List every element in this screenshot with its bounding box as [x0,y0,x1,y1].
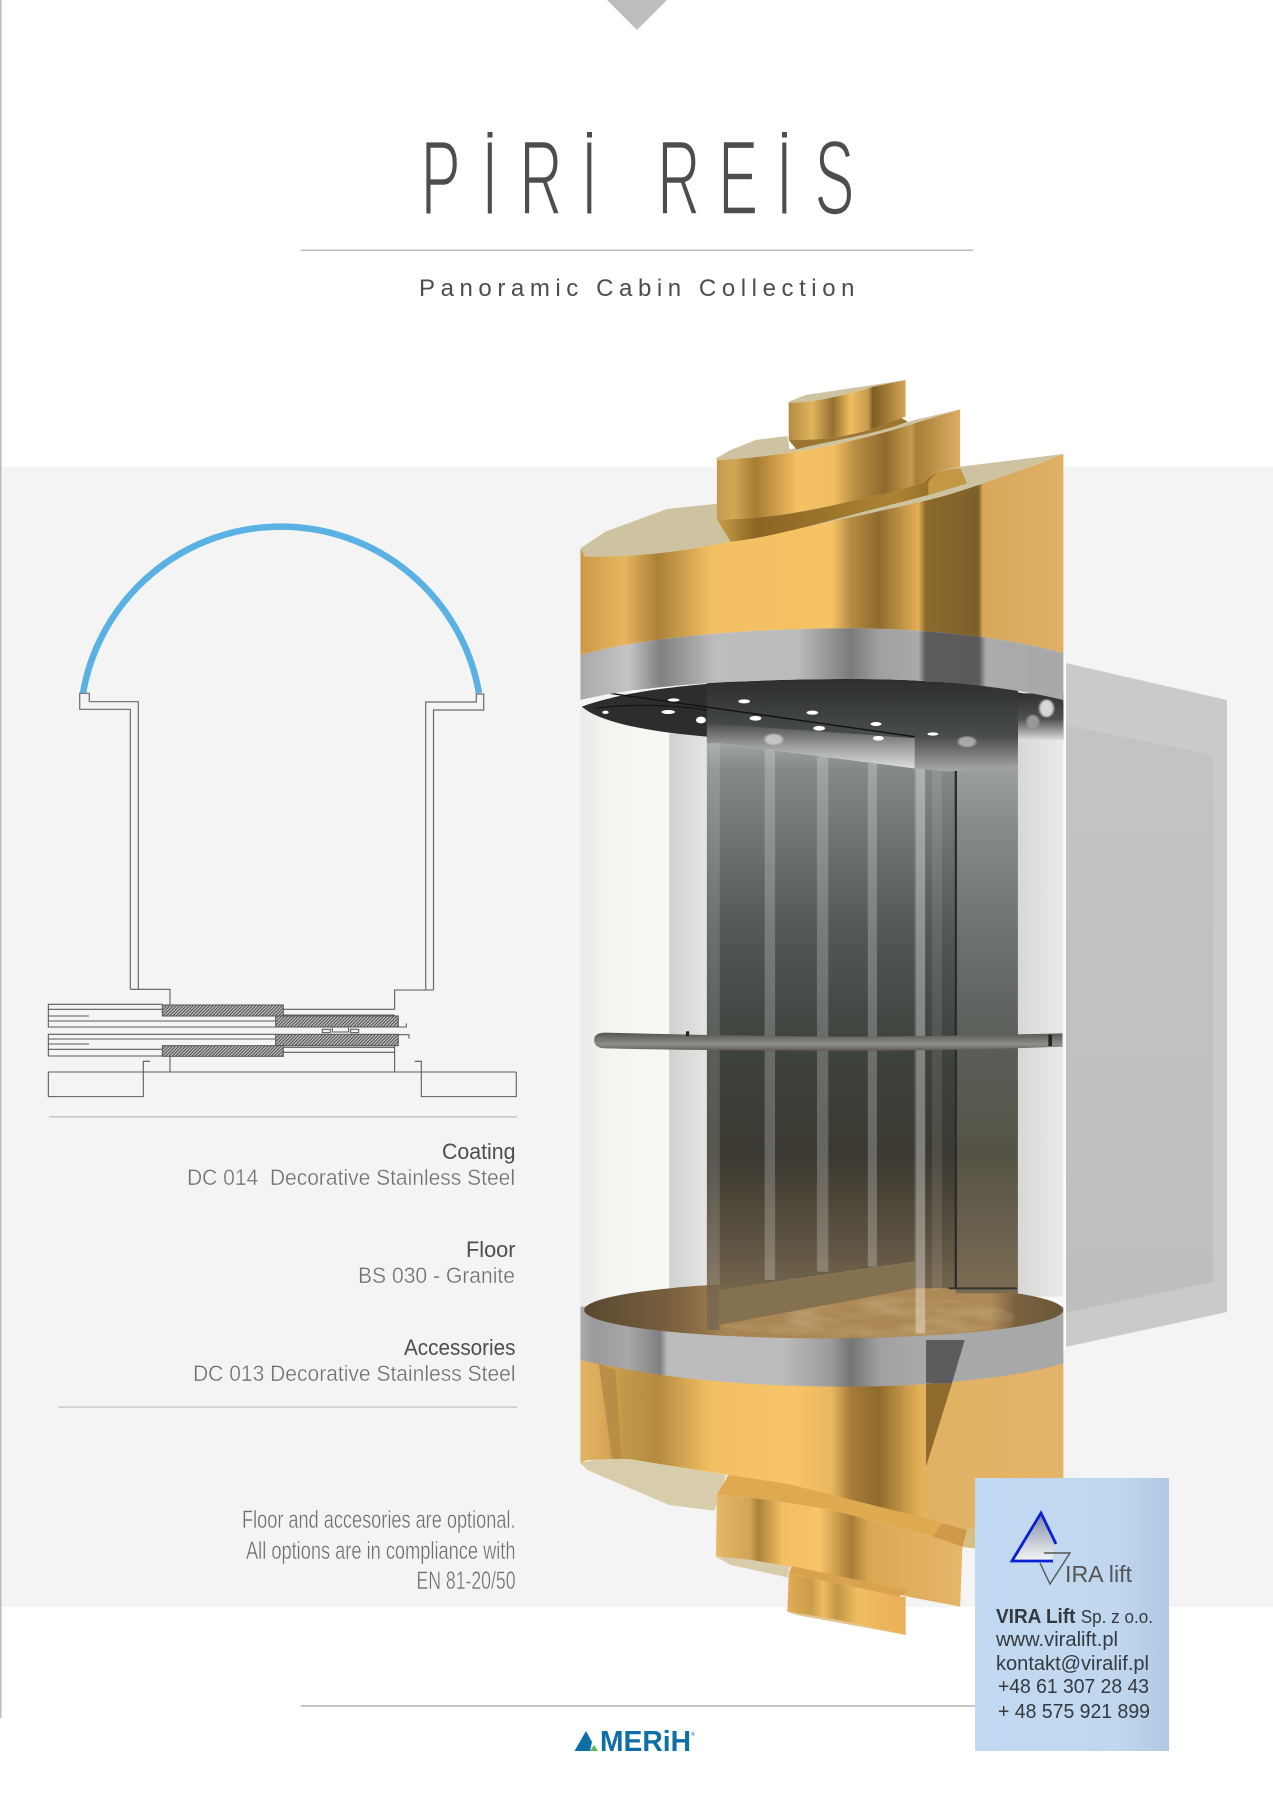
spec: floor [358,1237,516,1288]
tier two [716,409,960,460]
title rule [301,250,973,251]
lower steel band [580,1307,1063,1387]
title: PİRİ REİS [421,119,854,238]
spec: floor: Floor [466,1237,516,1262]
spec: accessories [193,1335,516,1386]
cabin interior glass and side walls [580,707,1063,1333]
handrail [594,1031,1062,1051]
dome arc [83,527,479,693]
underside beige [580,1459,726,1511]
subtitle: Panoramic Cabin Collection [419,275,854,302]
lower steel band and lower gold spiral [580,1307,1063,1635]
background panel [0,467,1273,1607]
compliance note: EN 81-20/50 [416,1567,516,1595]
divider bottom [58,1406,517,1408]
compliance note: Floor and accesories are optional. [242,1506,516,1534]
tier two [716,1495,962,1607]
logo: Merih: ® [691,1731,695,1738]
back wall panels [707,737,1018,1333]
upper gold spiral and steel band [580,380,1063,700]
steel band [580,628,1063,700]
spec: coating [187,1139,516,1190]
logo: Vira Lift: IRA lift [1065,1561,1133,1587]
cabin wall outlines [80,693,484,990]
tier three [787,1573,906,1635]
spec: coating: DC 014 Decorative Stainless Steel [187,1165,515,1190]
contact details: VIRA Lift Sp. z o.o. [996,1606,1153,1628]
side shaft panel [1063,655,1227,1350]
floor section [48,989,516,1097]
contact details: + 48 575 921 899 [998,1701,1150,1723]
marble floor [584,1282,1063,1338]
contact details: www.viralift.pl [995,1629,1118,1651]
gold body [580,454,1063,655]
left page edge line [0,0,2,1718]
divider top [49,1116,517,1118]
ceiling with lights [582,679,1063,772]
spec: coating: Coating [442,1139,516,1164]
contact details [995,1606,1153,1723]
tier three [789,417,908,449]
contact card [975,1478,1169,1751]
panoramic cabin illustration [580,380,1063,1635]
contact details: kontakt@viralif.pl [996,1653,1149,1675]
top beige surface [580,454,1063,560]
icon: top triangle marker [607,0,667,30]
footer rule [301,1705,975,1707]
contact details: +48 61 307 28 43 [998,1676,1149,1698]
logo: Merih: MERiH [600,1726,691,1758]
light vertical strips [765,740,942,1333]
logo: Vira Lift [1012,1513,1133,1587]
spec: floor: BS 030 - Granite [358,1263,515,1288]
spec: accessories: Accessories [404,1335,516,1360]
spec list [187,1139,516,1386]
technical cross-section drawing [48,527,516,1097]
compliance note: All options are in compliance with [246,1537,516,1565]
spec: accessories: DC 013 Decorative Stainless Steel [193,1361,516,1386]
compliance note [242,1506,516,1595]
